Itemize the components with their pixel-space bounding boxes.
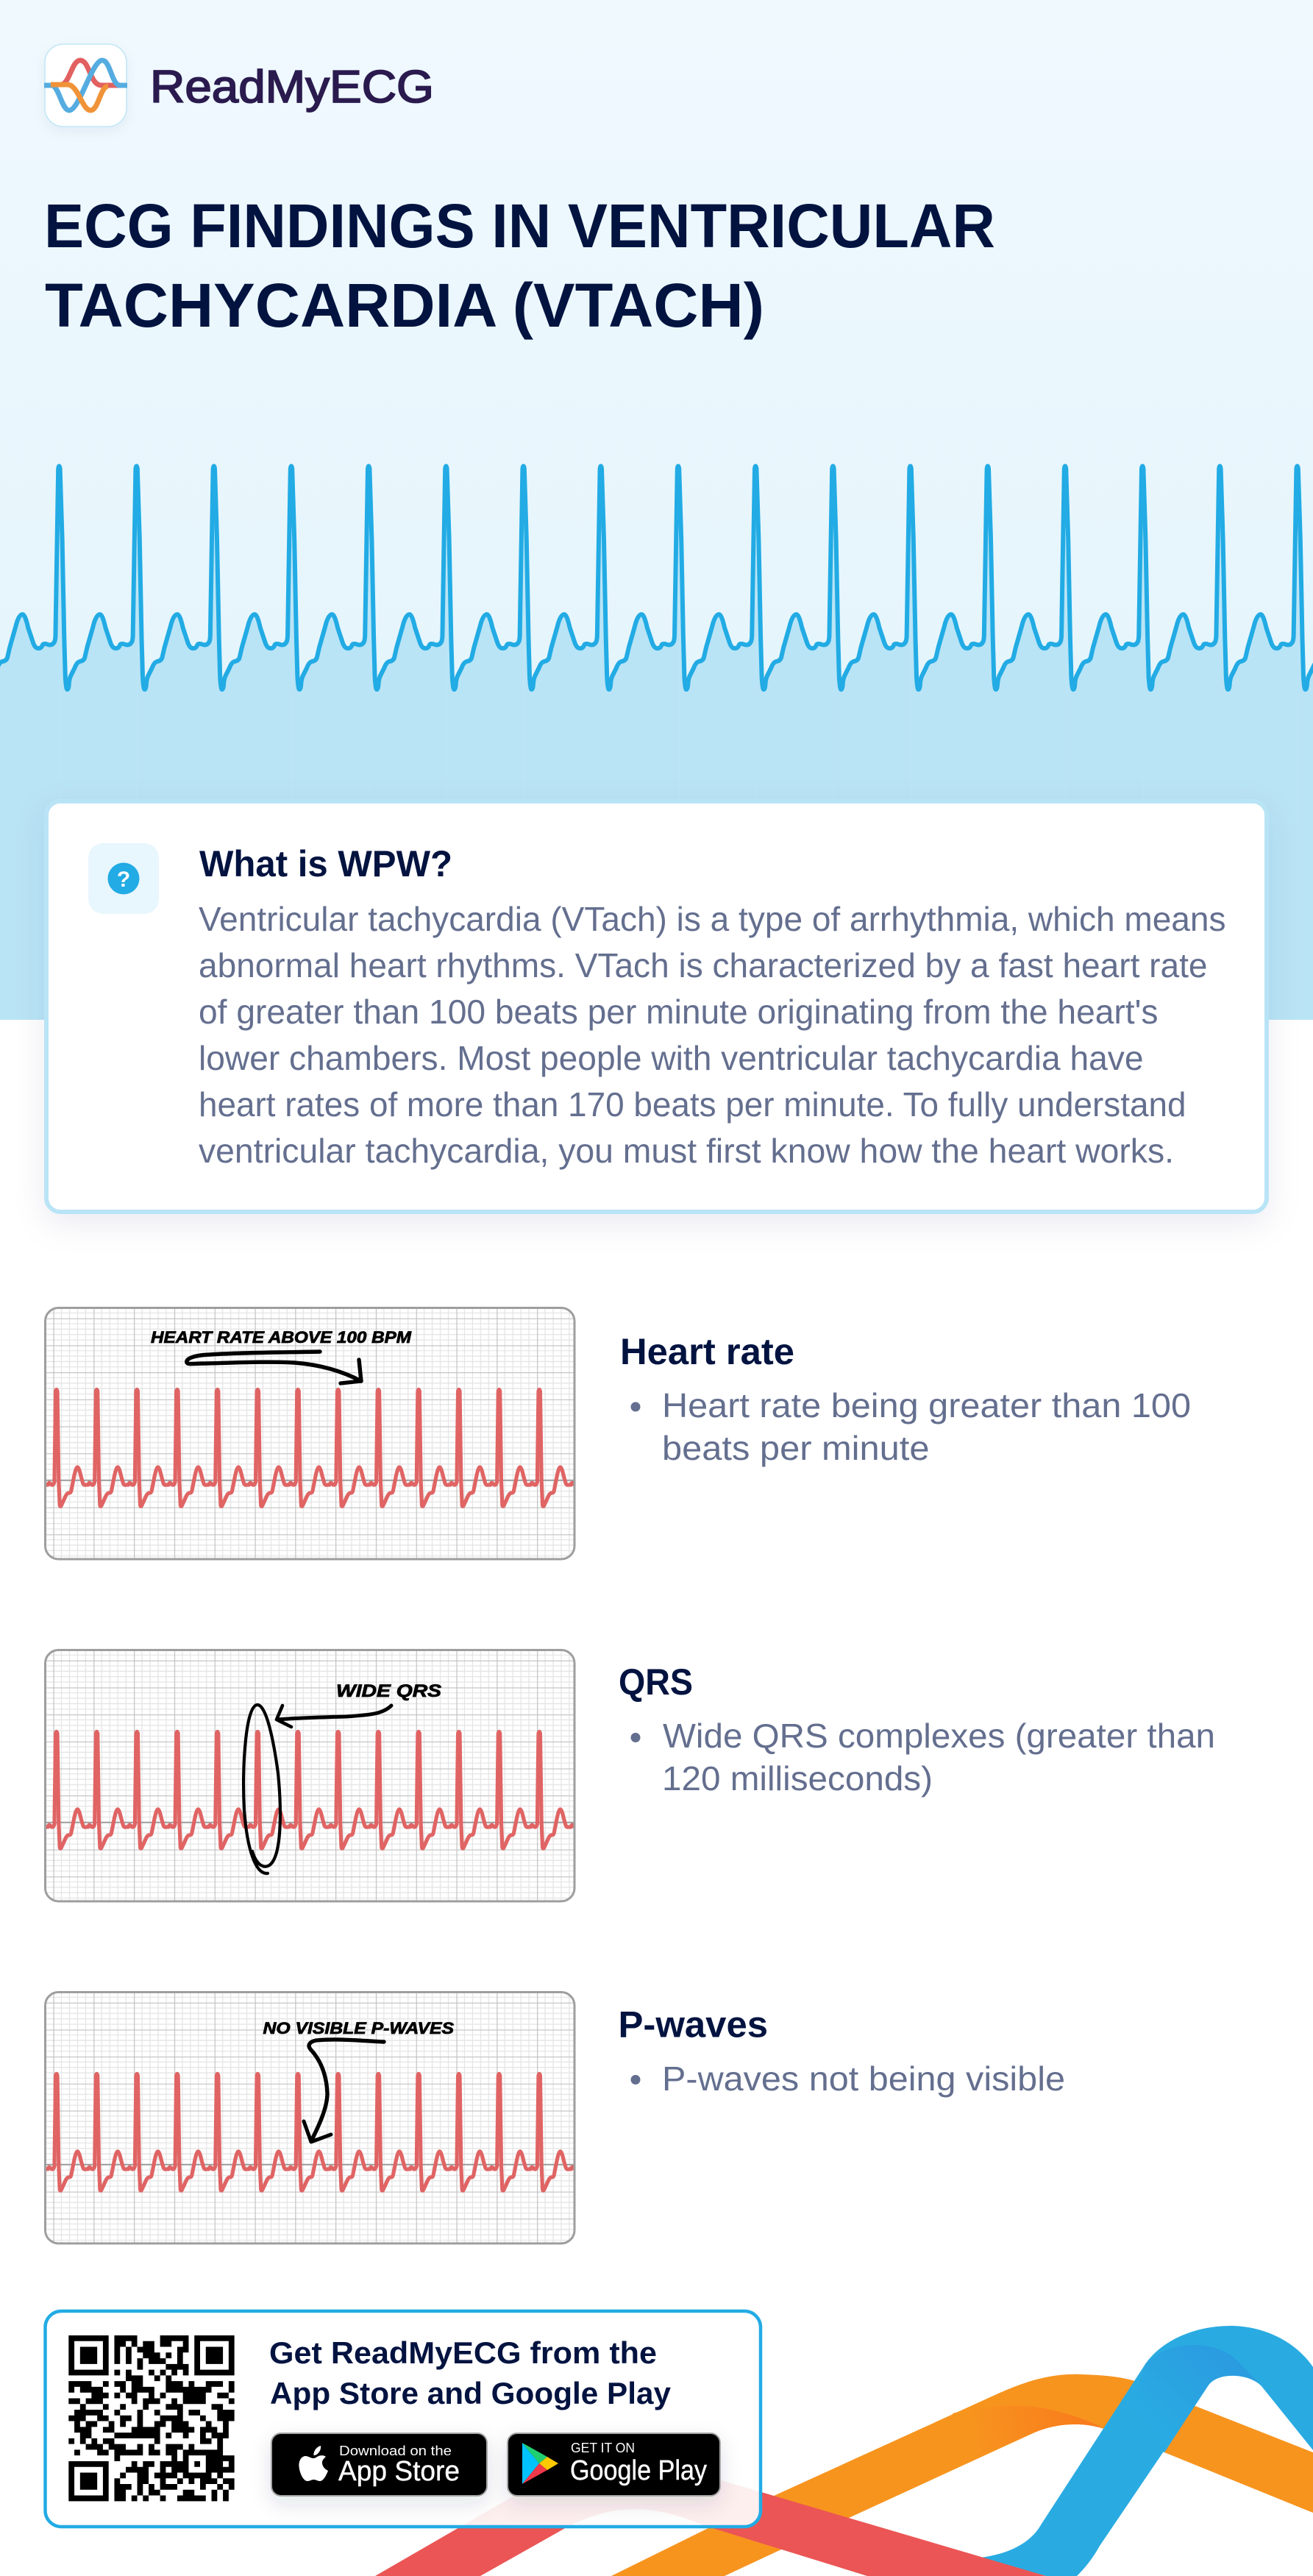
bullet list: QRS — [631, 1717, 1215, 1798]
Google Play button — [508, 2433, 720, 2496]
download heading — [269, 2335, 672, 2410]
icon: apple — [299, 2446, 328, 2481]
title — [44, 191, 995, 340]
card body text: ventricular tachycardia, you must first know how the heart works. — [199, 1132, 1174, 1170]
download heading: App Store and Google Play — [270, 2376, 672, 2410]
card body text — [199, 900, 1225, 1170]
Google Play button: GET IT ON — [571, 2441, 635, 2455]
red ribbon — [375, 2464, 1046, 2576]
logo wordmark: ReadMyECG — [150, 62, 434, 113]
icon: Google Play triangle — [522, 2443, 558, 2484]
annotation: heart rate above 100 bpm — [151, 1328, 412, 1383]
panel: QRS ECG strip — [17, 1650, 580, 1901]
QR code — [68, 2335, 235, 2501]
panel: heart rate ECG strip — [17, 1308, 580, 1559]
orange ribbon — [611, 2374, 1313, 2576]
heading: P-waves: P-waves — [618, 2004, 768, 2045]
bullet list: heart rate — [631, 1386, 1191, 1467]
annotation: no visible P-waves: NO VISIBLE P-WAVES — [263, 2019, 454, 2037]
Google Play button: Google Play — [570, 2455, 707, 2486]
title: ECG FINDINGS IN VENTRICULAR — [44, 191, 995, 260]
hero ECG wave — [0, 466, 1313, 1020]
card body text: lower chambers. Most people with ventricular tachycardia have — [199, 1039, 1143, 1077]
card body text: Ventricular tachycardia (VTach) is a type of arrhythmia, which means — [199, 900, 1225, 938]
decorative ribbons — [375, 2326, 1313, 2576]
panel: what is WPW card — [46, 801, 1267, 1212]
bullet list: P-waves: P-waves not being visible — [662, 2059, 1065, 2098]
title: TACHYCARDIA (VTACH) — [45, 271, 764, 340]
heading: QRS: QRS — [619, 1661, 693, 1703]
icon: question mark — [88, 843, 159, 914]
top background — [0, 0, 1313, 1020]
logo — [44, 44, 434, 127]
bullet list: QRS: Wide QRS complexes (greater than — [663, 1717, 1215, 1755]
download heading: Get ReadMyECG from the — [269, 2335, 657, 2370]
annotation: wide QRS — [243, 1681, 441, 1873]
heading: heart rate: Heart rate — [620, 1331, 794, 1372]
blue ribbon — [981, 2326, 1313, 2576]
logo icon — [44, 44, 127, 127]
App Store button — [271, 2433, 487, 2496]
App Store button: App Store — [338, 2456, 460, 2487]
annotation: heart rate above 100 bpm: HEART RATE ABOVE 100 BPM — [151, 1328, 412, 1346]
icon: question mark: ? — [117, 867, 130, 892]
card body text: of greater than 100 beats per minute originating from the heart's — [199, 993, 1158, 1031]
card body text: abnormal heart rhythms. VTach is characterized by a fast heart rate — [199, 946, 1207, 984]
App Store button: Download on the — [339, 2444, 452, 2458]
annotation: wide QRS: WIDE QRS — [336, 1681, 441, 1701]
card body text: heart rates of more than 170 beats per minute. To fully understand — [199, 1085, 1186, 1124]
bullet list: heart rate: beats per minute — [662, 1429, 930, 1467]
bullet list: QRS: 120 milliseconds) — [662, 1759, 933, 1798]
panel: P-waves ECG strip — [17, 1993, 580, 2243]
annotation: no visible P-waves — [263, 2019, 454, 2142]
card heading: What is WPW? — [199, 843, 452, 884]
bullet list: heart rate: Heart rate being greater than 100 — [662, 1386, 1191, 1424]
panel: app download — [46, 2311, 761, 2527]
